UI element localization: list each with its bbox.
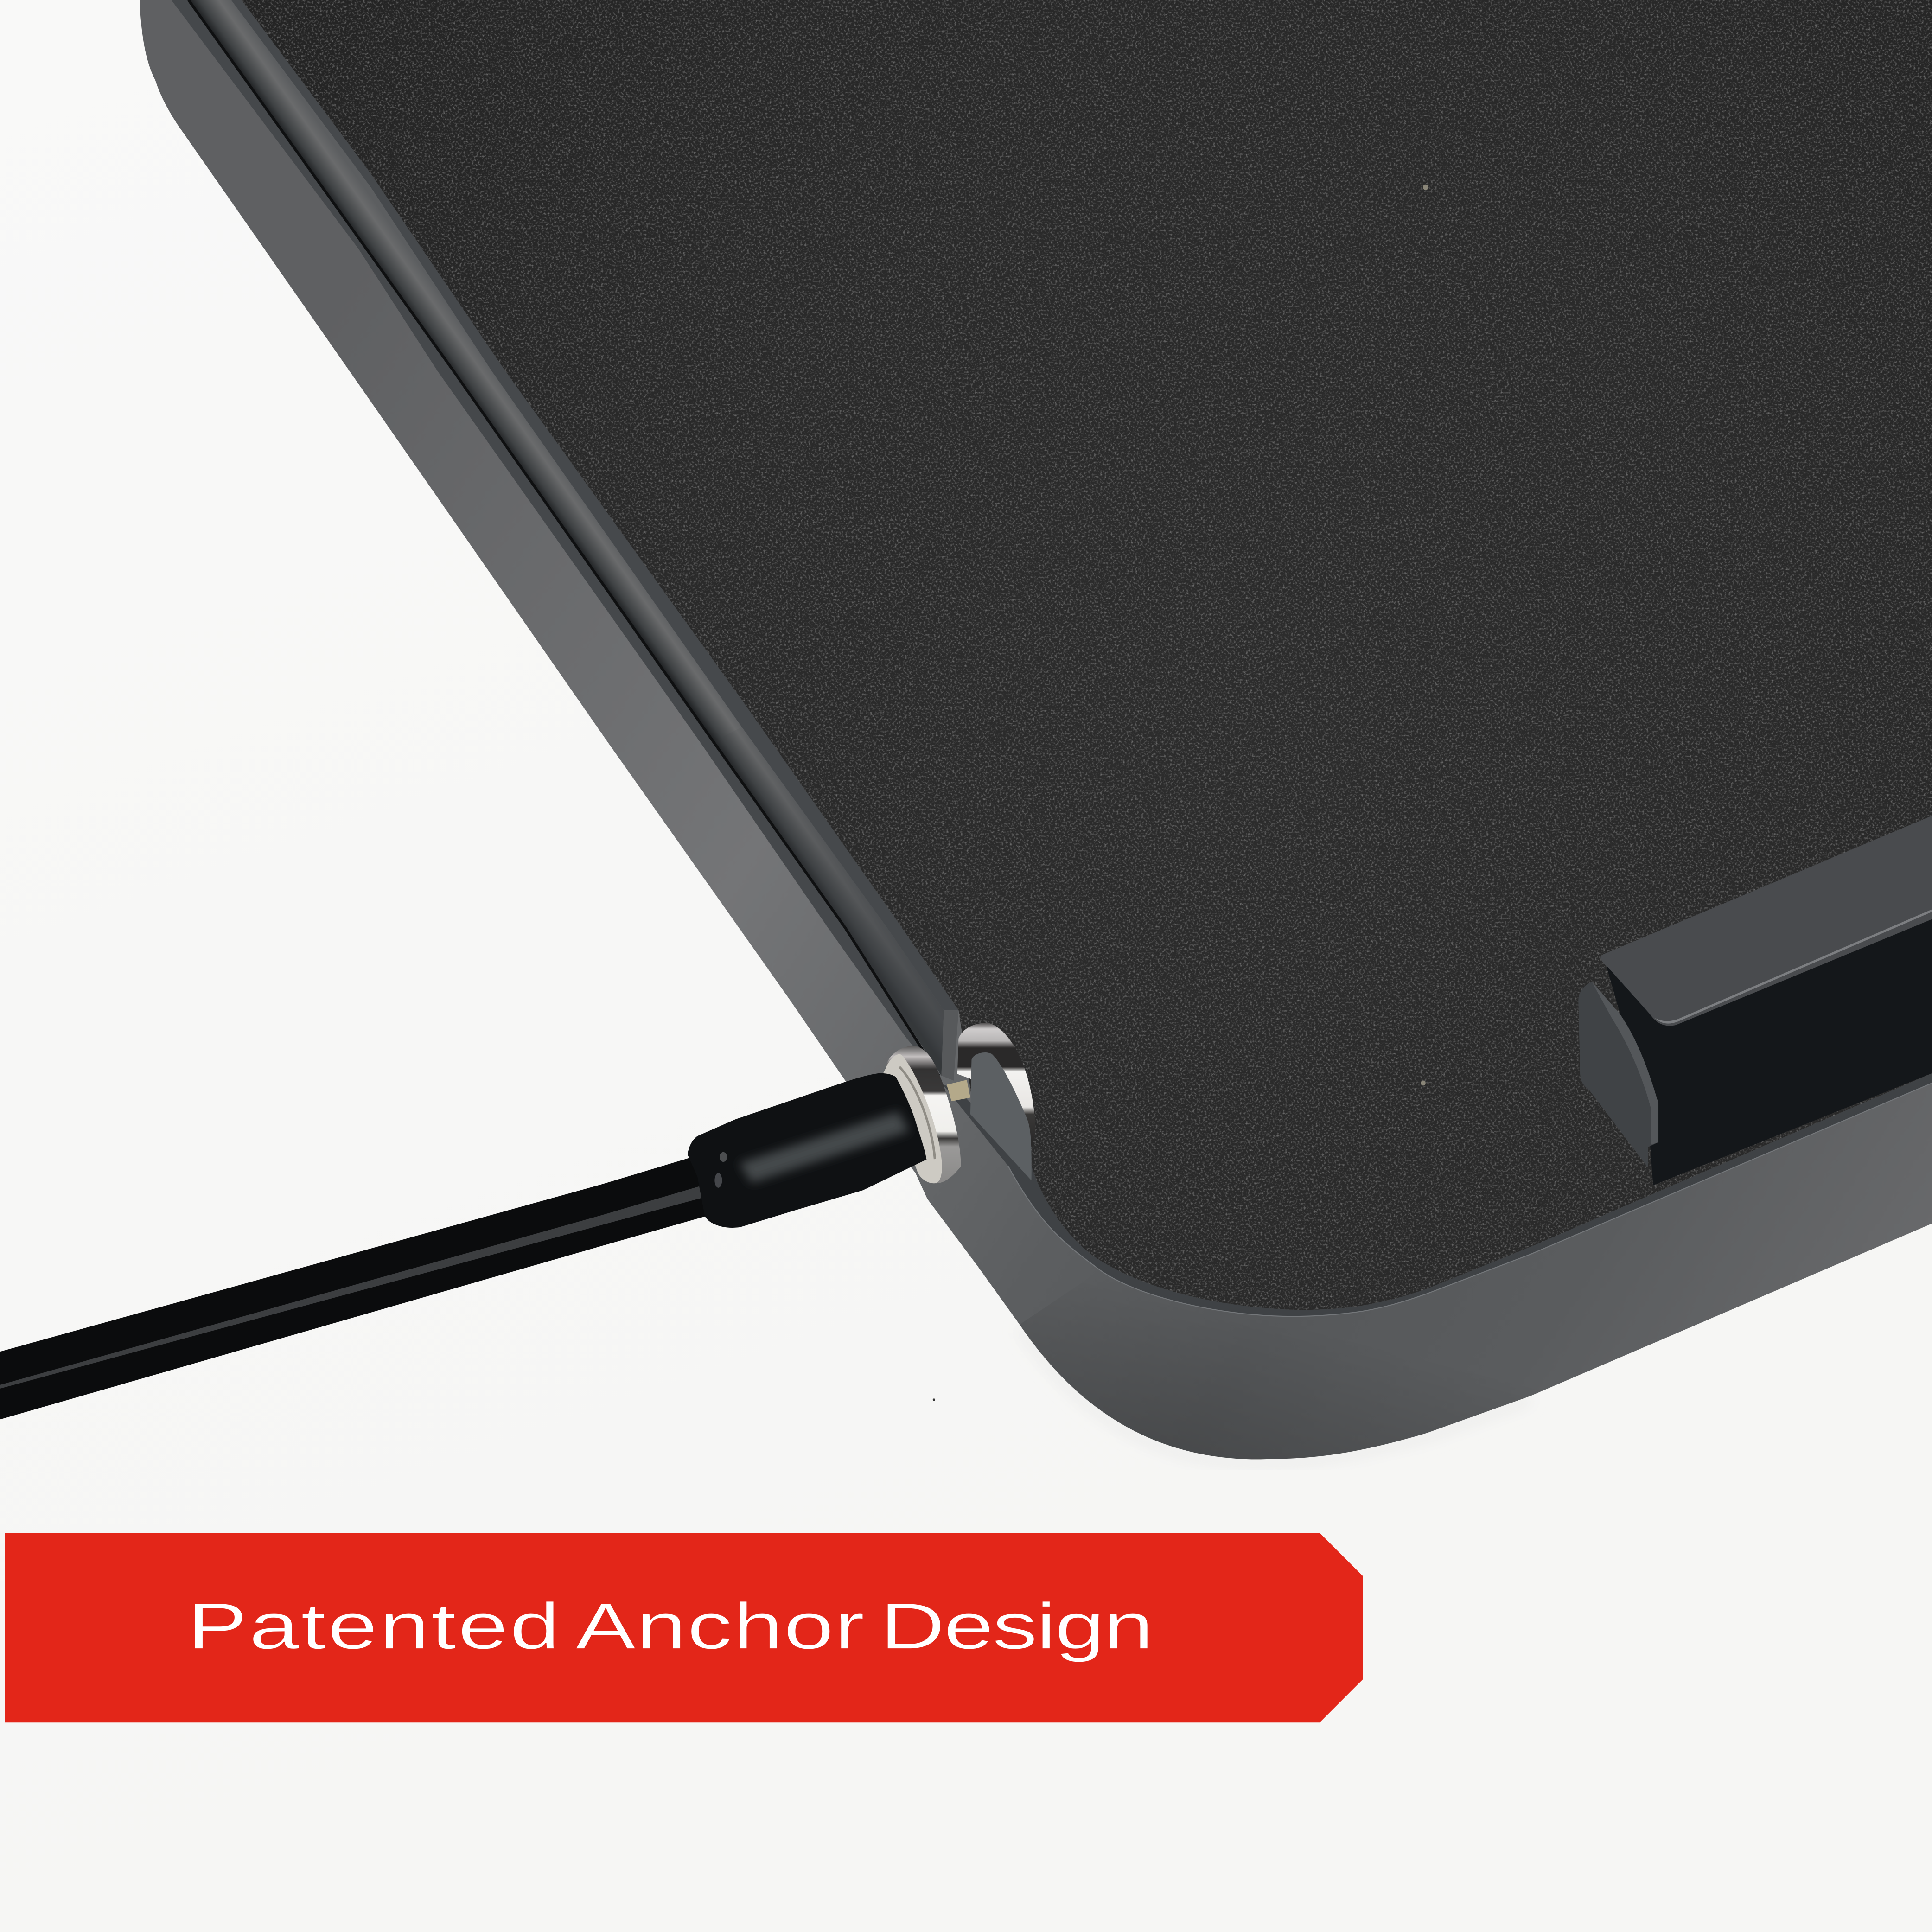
banner text: Anchor <box>575 1589 865 1663</box>
speck on background <box>933 1398 935 1401</box>
foam specks <box>1421 185 1428 1085</box>
lip highlight line <box>1008 1083 1932 1316</box>
tray wall lower shading <box>1020 1083 1932 1459</box>
foam base <box>242 0 1932 1310</box>
side rail inner band <box>231 0 959 1010</box>
side rail face darkening near end <box>714 727 944 1076</box>
cable highlight <box>0 1184 707 1389</box>
rail bevel highlight <box>1655 909 1932 1024</box>
side rail dark band <box>171 0 939 1076</box>
anchor ring inner groove <box>899 1067 935 1159</box>
banner text: Patented <box>187 1589 561 1663</box>
tray contact shadow <box>1020 1328 1530 1463</box>
plug highlight <box>740 1111 909 1183</box>
anchor ring front face <box>883 1054 942 1183</box>
plug body <box>688 1073 926 1228</box>
banner text: Design <box>880 1589 1152 1663</box>
tray <box>140 0 1932 1463</box>
cable <box>0 1157 714 1419</box>
foam pad <box>234 0 1932 1325</box>
tray outer wall <box>140 0 1932 1459</box>
cable and plug <box>0 1073 926 1419</box>
rail dark face <box>1607 907 1932 1186</box>
banner <box>5 1533 1363 1722</box>
banner shape <box>5 1533 1363 1722</box>
rail end cap edge <box>1592 982 1658 1145</box>
strain relief highlights <box>720 1152 727 1162</box>
anchor pin <box>947 1080 970 1101</box>
black seam line <box>189 0 939 1076</box>
rail top face <box>1600 816 1932 1026</box>
tray inner lip <box>943 1073 1932 1316</box>
anchor hardware <box>883 1023 1035 1183</box>
strain relief lower highlight <box>714 1173 722 1188</box>
foam speckle <box>234 0 1932 1325</box>
anchor outer ring <box>885 1046 961 1183</box>
side rail end <box>941 1010 959 1081</box>
anchor inner disc face <box>970 1052 1032 1180</box>
anchor inner disc <box>957 1023 1035 1148</box>
right hand rail <box>1578 816 1932 1186</box>
rail end cap <box>1578 982 1658 1167</box>
side rail face <box>189 0 944 1076</box>
